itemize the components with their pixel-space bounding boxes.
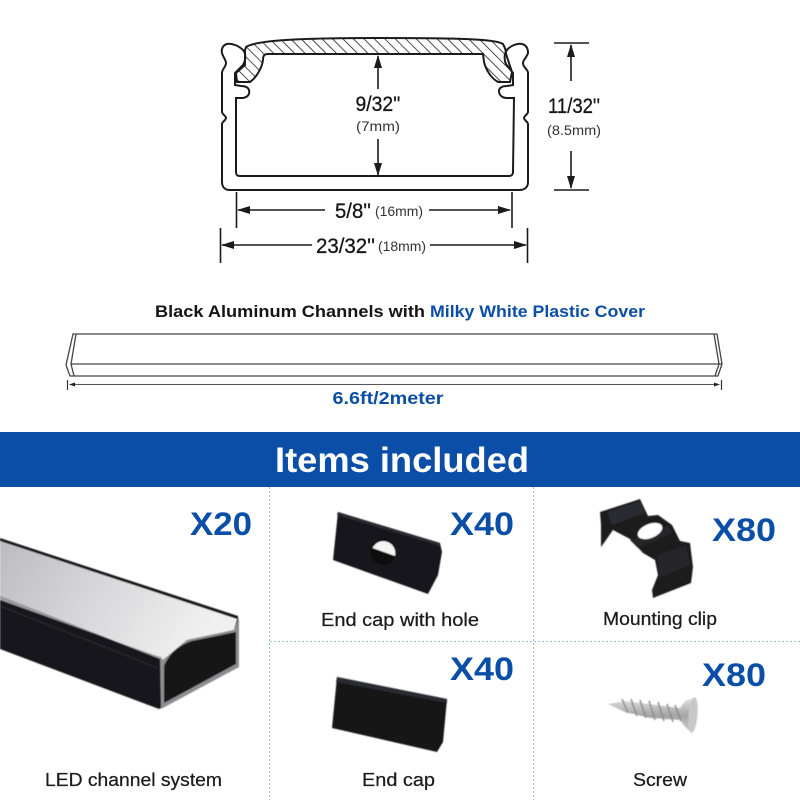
quantity: X80: [702, 657, 766, 693]
label: Mounting clip: [603, 608, 717, 629]
photo: screw: [608, 697, 699, 733]
item: screw: [608, 657, 766, 790]
dimension: inner height: [356, 56, 400, 175]
dimension: inner width: 5/8'': [335, 200, 371, 223]
quantity: X40: [450, 506, 514, 542]
dimension: outer height: 11/32'': [548, 95, 600, 118]
length dimension line: [68, 380, 722, 390]
dimension: inner width: [236, 192, 512, 228]
label: End cap with hole: [321, 609, 479, 630]
photo: cap with hole: [333, 512, 442, 594]
item: mounting clip: [600, 499, 776, 629]
photo: channel: [0, 538, 239, 709]
label: Screw: [633, 769, 688, 790]
item: end cap: [332, 651, 514, 790]
banner: items included: [0, 432, 800, 487]
dimension: inner height: (7mm): [356, 118, 400, 134]
dimension: inner height: 9/32'': [356, 93, 400, 116]
quantity: X20: [190, 506, 252, 542]
item: end cap with hole: [321, 506, 514, 630]
heading: channel description: Black Aluminum Channels with: [155, 303, 425, 321]
quantity: X40: [450, 651, 514, 687]
length label: 6.6ft/2meter: [332, 388, 444, 408]
label: LED channel system: [45, 769, 222, 790]
cross-section diagram: [220, 38, 601, 263]
dimension: outer height: (8.5mm): [547, 122, 601, 138]
heading: channel description: [155, 303, 646, 321]
aluminum channel profile: [222, 44, 528, 190]
quantity: X80: [712, 512, 776, 548]
photo: end cap: [332, 677, 447, 752]
dimension: outer width: (18mm): [378, 238, 426, 254]
banner: items included: Items included: [275, 441, 529, 480]
dimension: outer height: [547, 43, 601, 190]
hatched plastic cover: [236, 38, 512, 82]
heading: channel description: Milky White Plastic Cover: [430, 303, 646, 321]
dimension: inner width: (16mm): [375, 203, 423, 219]
photo: clip: [600, 499, 693, 598]
channel length drawing: [66, 334, 722, 376]
item: LED channel system: [0, 506, 252, 790]
label: End cap: [362, 769, 435, 790]
dimension: outer width: 23/32'': [316, 235, 375, 258]
dimension: outer width: [220, 228, 528, 263]
